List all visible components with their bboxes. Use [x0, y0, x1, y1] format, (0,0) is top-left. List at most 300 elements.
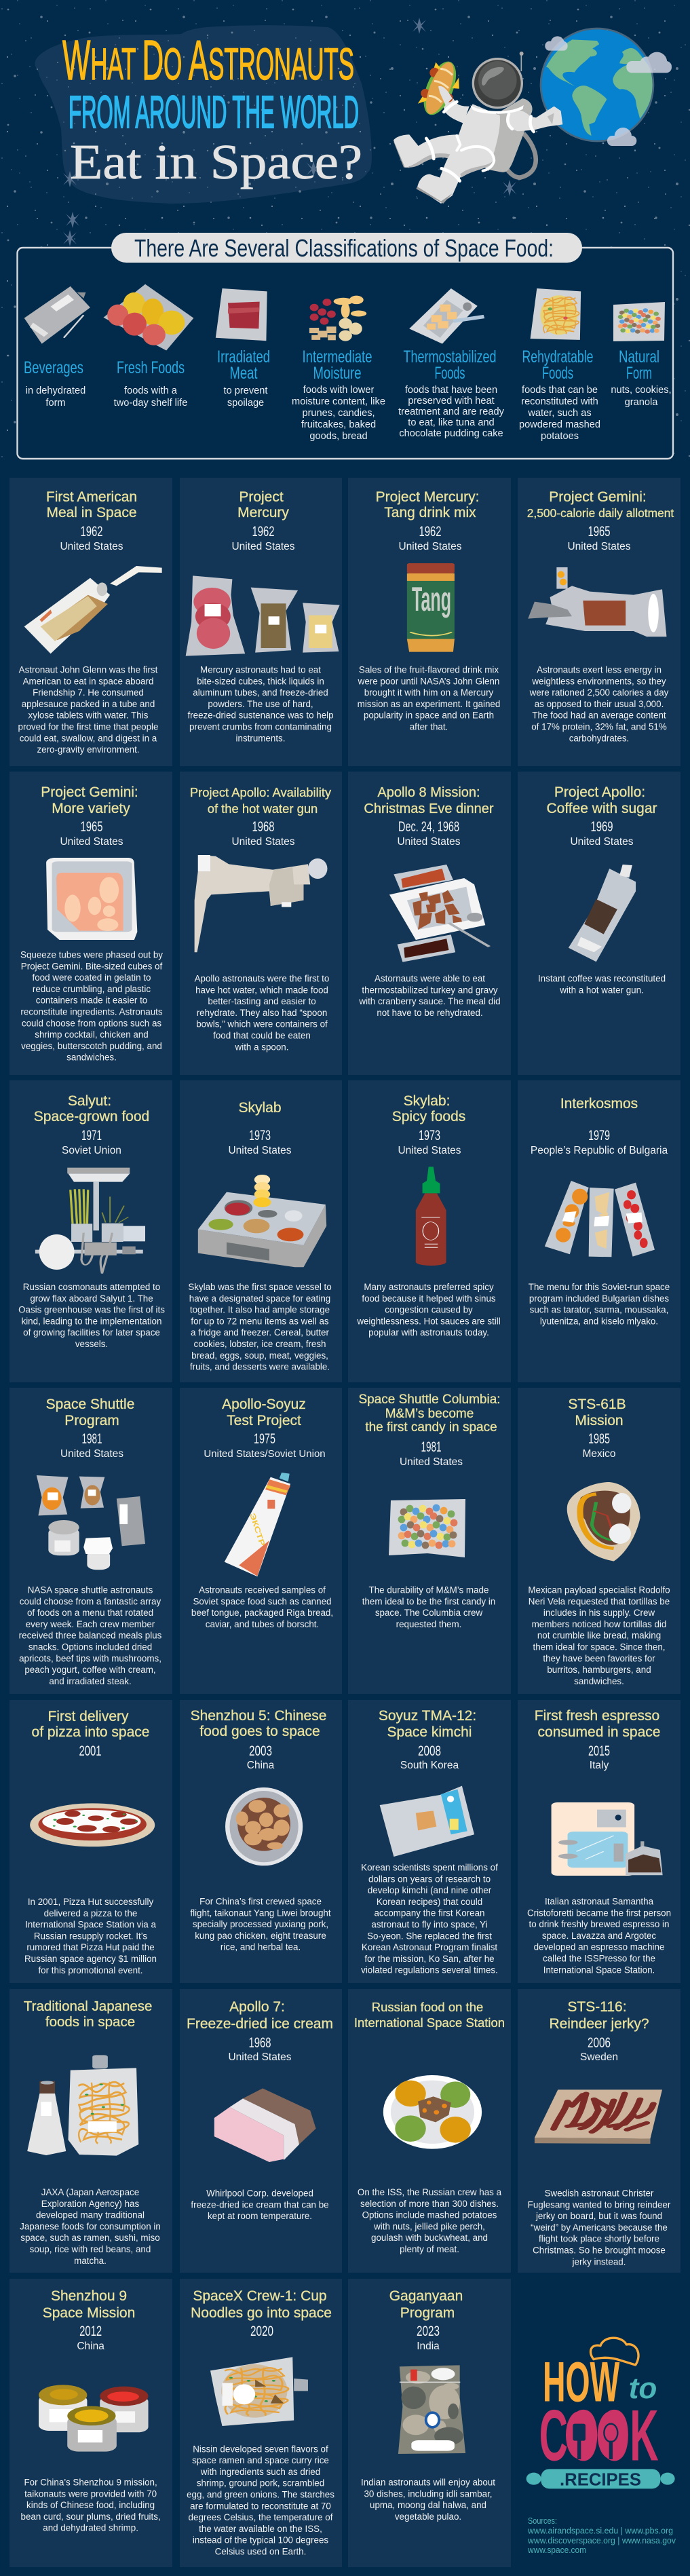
year and country: Soviet Union: [62, 1145, 121, 1156]
body text: Project Gemini. Bite-sized cubes of: [21, 961, 162, 971]
body text: taikonauts were provided with 70: [24, 2488, 157, 2499]
year and country: 1971: [81, 1128, 102, 1143]
body text: space, such as ramen, sushi, miso: [20, 2233, 160, 2243]
body text: apricots, beef tips with mushrooms,: [19, 1653, 161, 1663]
right leg and boot: [416, 145, 493, 204]
icon: hot water gun: [195, 855, 327, 952]
category: rehydratable foods: Rehydratable: [522, 347, 593, 366]
body text: bread, eggs, soup, meat, veggies,: [191, 1350, 328, 1361]
body text: requested them.: [396, 1619, 461, 1629]
body text: sandwiches.: [66, 1053, 117, 1063]
year and country: [400, 1439, 463, 1468]
body text: dollars on years of research to: [368, 1874, 491, 1884]
year and country: 1973: [249, 1128, 271, 1143]
year and country: [228, 2035, 292, 2063]
category: thermostabilized foods: treatment and are ready: [398, 406, 505, 417]
heading: Apollo-Soyuz: [222, 1397, 306, 1412]
body text: Neri Vela requested that tortillas be: [529, 1596, 670, 1606]
icon: gemini food bag: [528, 567, 666, 637]
body text: bowls,” which were containers of: [196, 1019, 328, 1029]
body text: caviar, and tubes of borscht.: [206, 1619, 319, 1629]
body text: Nissin developed seven flavors of: [193, 2444, 328, 2454]
body text: for this promotional event.: [38, 1965, 143, 1975]
heading: Gaganyaan: [389, 2288, 463, 2304]
card: Shenzhou 9 Space Mission: [9, 2279, 172, 2567]
logo: How to Cook Recipes: [526, 2338, 675, 2490]
heading pill: There Are Several Classifications of Space Food:: [134, 234, 554, 262]
body text: program included Bulgarian dishes: [529, 1293, 669, 1304]
body text: rumored that Pizza Hut paid the: [26, 1942, 155, 1952]
category: rehydratable foods: reconstituted with: [521, 396, 598, 407]
body text: freeze-dried ice cream that can be: [191, 2199, 329, 2210]
body text: violated regulations several times.: [361, 1965, 498, 1975]
body text: veggies, butterscotch pudding, and: [21, 1041, 162, 1051]
heading: Skylab: [238, 1100, 282, 1116]
body text: develop kimchi (and nine other: [368, 1885, 492, 1895]
body text: weightless environments, so they: [531, 676, 666, 686]
icon: borscht tube: ЭКСТР: [248, 1512, 267, 1547]
body text: bite-sized cubes, thick liquids in: [197, 676, 324, 686]
body text: brought it with him on a Mercury: [364, 687, 494, 698]
body text: Cristoforetti became the first person: [527, 1908, 671, 1918]
heading: Space Shuttle: [46, 1397, 134, 1412]
year and country: United States/Soviet Union: [204, 1448, 326, 1460]
body text: Mercury astronauts had to eat: [200, 665, 321, 675]
body text: plenty of meat.: [400, 2244, 459, 2254]
body text: matcha.: [74, 2256, 107, 2266]
heading: Salyut:: [68, 1093, 111, 1109]
category: intermediate moisture: moisture content, like: [292, 396, 385, 407]
body text: not crumble like bread, making: [537, 1631, 661, 1641]
category: thermostabilized foods: chocolate pudding cake: [399, 428, 503, 439]
year and country: 1975: [254, 1431, 275, 1447]
body text: for up to 72 menu items as well as: [191, 1316, 329, 1326]
body text: have a designated space for eating: [189, 1293, 330, 1304]
body text: Christmas. So he brought moose: [533, 2245, 666, 2256]
body text: In 2001, Pizza Hut successfully: [28, 1897, 153, 1907]
body text: and dehydrated shrimp.: [43, 2523, 138, 2533]
heading: Project Gemini:: [549, 489, 647, 505]
card: Apollo-Soyuz Test Project: [180, 1388, 342, 1694]
year and country: India: [417, 2341, 440, 2352]
body text: jerky instead.: [572, 2256, 626, 2267]
body text: food were coated in gelatin to: [33, 972, 151, 983]
year and country: United States: [231, 541, 295, 552]
category: thermostabilized foods: to eat, like tuna and: [408, 417, 495, 428]
heading: Space Mission: [43, 2305, 135, 2321]
card: Project Mercury Tang drink mix: [348, 478, 511, 766]
body text: rehydrate. They also had “spoon: [197, 1008, 327, 1018]
body text: soup, rice with red beans, and: [30, 2244, 151, 2254]
heading: Space kimchi: [387, 1724, 472, 1740]
logo: How to Cook Recipes: .RECIPES: [560, 2469, 641, 2490]
body text: accompany the first Korean: [374, 1908, 485, 1918]
year and country: 2015: [588, 1743, 610, 1759]
body text: The menu for this Soviet-run space: [529, 1282, 670, 1292]
category: intermediate moisture: [292, 296, 385, 442]
icon: kimchi pouch: [380, 1786, 474, 1857]
logo: How to Cook Recipes: to: [629, 2372, 657, 2405]
heading: Tang drink mix: [384, 505, 476, 520]
body text: selection of more than 300 dishes.: [360, 2199, 499, 2209]
category: rehydratable foods: [519, 288, 600, 442]
body text: developed many traditional: [36, 2210, 145, 2220]
body text: food that could be eaten: [213, 1030, 311, 1041]
body text: fruits, and desserts were available.: [190, 1362, 330, 1372]
category: rehydratable foods: potatoes: [541, 431, 579, 442]
body text: not have to be rehydrated.: [377, 1008, 483, 1018]
card: First delivery of pizza into space: [9, 1700, 172, 1983]
left arm: [440, 87, 469, 124]
body text: burritos, hamburgers, and: [547, 1665, 651, 1675]
body text: sandwiches.: [574, 1676, 624, 1686]
category: irradiated meat: to prevent: [224, 385, 267, 396]
body text: Instant coffee was reconstituted: [538, 973, 666, 984]
body text: with cranberry sauce. The meal did: [358, 996, 501, 1006]
body text: flight took place shortly before: [539, 2234, 659, 2244]
icon: Skylab food tray: [198, 1175, 326, 1267]
heading: Space-grown food: [34, 1109, 149, 1124]
year and country: [398, 524, 462, 552]
icon: espresso machine: [552, 1802, 663, 1876]
card: Skylab: [180, 1080, 342, 1382]
heading: Project: [239, 489, 284, 505]
body text: called the ISSPresso for the: [543, 1953, 655, 1964]
right arm and thumb: [507, 107, 562, 132]
body text: Many astronauts preferred spicy: [364, 1282, 494, 1292]
body text: NASA space shuttle astronauts: [28, 1585, 153, 1595]
body text: proved for the first time that people: [18, 722, 158, 732]
body text: instruments.: [236, 733, 285, 743]
card: Project Apollo Coffee with sugar: [518, 772, 681, 1075]
body text: congestion caused by: [385, 1305, 473, 1315]
body text: they have been favorites for: [543, 1653, 655, 1663]
icon: earth with clouds: [540, 28, 672, 146]
heading: Interkosmos: [560, 1096, 638, 1112]
body text: are formulated to reconstitute at 70: [190, 2501, 331, 2511]
body text: Oasis greenhouse was the first of its: [18, 1305, 165, 1315]
body text: better-tasting and easier to: [208, 996, 316, 1006]
category: natural form: Natural: [619, 347, 659, 366]
heading: food goes to space: [199, 1724, 320, 1739]
category: intermediate moisture: fruitcakes, baked: [301, 419, 376, 430]
panel: classifications of space food: [18, 233, 673, 459]
year and country: China: [77, 2341, 104, 2352]
body text: powders. The use of hard,: [208, 699, 313, 709]
year and country: [228, 1128, 292, 1156]
card: Apollo 8 Mission Christmas Eve dinner: [348, 772, 511, 1075]
category: beverages: Beverages: [24, 358, 83, 377]
category: natural form: granola: [625, 397, 658, 408]
heading: Shenzhou 5: Chinese: [191, 1708, 326, 1724]
body text: popularity in space and on Earth: [364, 711, 494, 721]
body text: Celsius used on Earth.: [215, 2546, 306, 2557]
body text: JAXA (Japan Aerospace: [41, 2187, 139, 2197]
body text: received three balanced meals plus: [19, 1631, 162, 1641]
year and country: 2003: [249, 1743, 272, 1759]
body text: could choose from options such as: [22, 1018, 161, 1028]
sources: www.airandspace.si.edu | www.pbs.org: [527, 2526, 673, 2535]
card: Russian food on the ISS: [348, 1989, 511, 2273]
body text: xylose tablets with water. This: [28, 711, 149, 721]
year and country: 1965: [80, 819, 103, 835]
body text: The food had an average content: [532, 711, 666, 721]
icon: Tang jar: Tang: [412, 580, 451, 618]
icon: freeze-dried ice cream: [214, 2088, 316, 2162]
category: intermediate moisture: goods, bread: [309, 431, 368, 442]
heading: Apollo 7:: [229, 1999, 285, 2015]
category: fresh foods: two-day shelf life: [114, 398, 187, 409]
body text: have hot water, which made food: [195, 985, 328, 995]
card: Salyut Space-grown food: [9, 1080, 172, 1382]
heading: [527, 489, 674, 520]
body text: Russian cosmonauts attempted to: [23, 1282, 160, 1292]
body text: them ideal for space. Since then,: [533, 1642, 666, 1652]
year and country: United States: [567, 541, 631, 552]
body text: Korean recipes) that could: [377, 1897, 482, 1907]
card: SpaceX Crew-1 Cup Noodles: [180, 2279, 342, 2567]
category: fresh foods: Fresh Foods: [117, 358, 185, 377]
body text: reconstitute ingredients. Astronauts: [20, 1007, 163, 1017]
body text: Skylab was the first space vessel to: [188, 1282, 332, 1292]
category: thermostabilized foods: preserved with heat: [408, 396, 495, 406]
body text: upma, moong dal halwa, and: [370, 2500, 486, 2510]
body text: 30 dishes, including idli sambar,: [364, 2488, 493, 2499]
left boot and leg: [394, 134, 459, 168]
body text: every week. Each crew member: [26, 1619, 155, 1629]
year and country: [580, 2035, 618, 2063]
body text: with a spoon.: [235, 1042, 288, 1052]
body text: Russian resupply rocket. It’s: [34, 1931, 147, 1941]
body text: mission as an experiment. It gained: [358, 699, 500, 709]
year and country: 2008: [418, 1743, 441, 1759]
body text: could eat, swallow, and digest in a: [20, 733, 157, 743]
body text: astronaut to fly into space, Yi: [371, 1919, 488, 1930]
card: Skylab Spicy foods: [348, 1080, 511, 1382]
icon: plate of Russian food: [383, 2075, 482, 2149]
icon: jerky on board: [535, 2089, 662, 2144]
body text: space. The Columbia crew: [375, 1608, 482, 1618]
body text: a fridge and freezer. Cereal, butter: [191, 1327, 330, 1338]
sources: www.space.com: [527, 2545, 586, 2555]
header title blob: [35, 25, 372, 204]
year and country: 1968: [252, 819, 274, 835]
year and country: Sweden: [580, 2051, 618, 2063]
body text: The durability of M&M’s made: [369, 1585, 488, 1595]
year and country: United States: [60, 1448, 123, 1460]
body text: includes in his supply. Crew: [543, 1608, 655, 1618]
body text: aluminum tubes, and freeze-dried: [193, 687, 328, 698]
year and country: [77, 2324, 104, 2352]
card: STS-61B Mission: [518, 1388, 681, 1694]
category: irradiated meat: spoilage: [227, 398, 264, 409]
sources: Sources:: [528, 2516, 557, 2526]
card: Apollo 7 Freeze-dried ice cream: [180, 1989, 342, 2273]
body text: with a hot water gun.: [559, 985, 644, 995]
body text: peach yogurt, coffee with cream,: [24, 1665, 156, 1675]
year and country: 1965: [588, 524, 611, 539]
body text: space ramen and space curry rice: [192, 2455, 329, 2465]
body text: of foods on a menu that rotated: [27, 1608, 153, 1618]
year: 2001: [79, 1743, 102, 1759]
heading: Spicy foods: [392, 1109, 465, 1124]
body text: Astornauts were able to eat: [375, 973, 485, 984]
heading: Noodles go into space: [191, 2305, 332, 2321]
category: thermostabilized foods: Thermostabilized: [403, 347, 497, 366]
body text: Fuglesang wanted to bring reindeer: [528, 2199, 671, 2210]
card: Traditional Japanese foods in space: [9, 1989, 172, 2273]
body text: rice, and herbal tea.: [221, 1942, 301, 1952]
year and country: 1973: [419, 1128, 440, 1143]
body text: with ingredients such as dried: [200, 2467, 320, 2477]
card: Project Mercury: [180, 478, 342, 766]
year and country: 2012: [79, 2324, 102, 2339]
body text: delivered a pizza to the: [44, 1908, 137, 1918]
body text: Soviet space food such as canned: [193, 1596, 331, 1606]
year and country: [231, 524, 295, 552]
title: Eat in Space?: [70, 134, 362, 189]
heading: International Space Station: [354, 2015, 505, 2030]
icon: candy bag: [389, 1499, 465, 1557]
body text: degrees Celsius, the temperature of: [189, 2512, 333, 2522]
body text: weightlessness. Hot sauces are still: [356, 1316, 501, 1326]
body text: beef tongue, packaged Riga bread,: [191, 1608, 333, 1618]
year and country: 1981: [81, 1431, 102, 1447]
year and country: 1979: [588, 1128, 610, 1143]
card: Gaganyaan Program: [348, 2279, 511, 2567]
year and country: 1962: [419, 524, 441, 539]
body text: kind, leading to the implementation: [22, 1316, 161, 1326]
category: intermediate moisture: prunes, candies,: [302, 408, 375, 419]
year and country: 2006: [588, 2035, 611, 2051]
body text: together. It also had ample storage: [190, 1305, 330, 1315]
year and country: United States: [60, 541, 123, 552]
heading: Russian food on the: [372, 2000, 483, 2014]
body text: For China’s Shenzhou 9 mission,: [24, 2477, 157, 2488]
year and country: [231, 819, 295, 848]
body text: and irradiated steak.: [49, 1676, 132, 1686]
body text: Mexican payload specialist Rodolfo: [528, 1585, 670, 1595]
icon: borscht tube: [225, 1473, 290, 1576]
year and country: United States: [398, 541, 462, 552]
heading: Apollo 8 Mission:: [377, 785, 480, 800]
logo: How to Cook Recipes: HOW: [543, 2350, 620, 2413]
heading: Test Project: [227, 1413, 301, 1428]
body text: Italian astronaut Samantha: [545, 1896, 654, 1907]
body text: Korean scientists spent millions of: [361, 1862, 498, 1873]
heading: Shenzhou 9: [51, 2288, 127, 2304]
icon: astronaut with sandwich: [394, 52, 562, 204]
body text: Friendship 7. He consumed: [33, 687, 144, 698]
category: irradiated meat: Meat: [229, 364, 258, 383]
card: Project Apollo hot water gun: [180, 772, 342, 1075]
year and country: [567, 524, 631, 552]
heading: Traditional Japanese: [24, 1999, 152, 2014]
year and country: [204, 1431, 326, 1460]
card: Soyuz TMA-12 Space kimchi: [348, 1700, 511, 1983]
heading: M&M’s become: [385, 1407, 474, 1421]
card: First fresh espresso consumed in space: [518, 1700, 681, 1983]
icon: bowl of pork and chicken: [225, 1787, 303, 1865]
heading: SpaceX Crew-1: Cup: [193, 2288, 327, 2304]
year and country: [582, 1431, 616, 1460]
icon: Tang jar: [407, 563, 455, 652]
body text: space. Lavazza and Argotec: [542, 1931, 656, 1941]
body text: Squeeze tubes were phased out by: [20, 950, 163, 960]
category: natural form: Form: [626, 364, 652, 383]
text: FROM AROUND THE WORLD: [69, 87, 359, 138]
body text: food because it helped with sinus: [362, 1293, 496, 1304]
year and country: [60, 1431, 123, 1460]
icon: food tray: [46, 858, 137, 940]
body text: Japanese foods for consumption in: [20, 2221, 161, 2231]
heading: foods in space: [45, 2014, 135, 2030]
heading: Project Gemini:: [41, 784, 138, 800]
category: rehydratable foods: foods that can be: [522, 385, 598, 396]
heading: Mercury: [237, 505, 289, 520]
heading: More variety: [52, 801, 130, 816]
icon: three food cans: [39, 2385, 149, 2452]
body text: grow flax aboard Salyut 1. The: [30, 1293, 153, 1304]
year: 2020: [250, 2324, 273, 2339]
body text: Korean Astronaut Program finalist: [362, 1942, 497, 1952]
year and country: United States: [400, 1456, 463, 1468]
year and country: [588, 1743, 610, 1771]
year and country: [247, 1743, 275, 1771]
year and country: United States: [231, 836, 295, 848]
card: Space Shuttle Program: [9, 1388, 172, 1694]
category: thermostabilized foods: Foods: [434, 364, 465, 383]
body text: bean curd, sour plums, dried fruits,: [21, 2512, 161, 2522]
body text: Indian astronauts will enjoy about: [361, 2477, 495, 2488]
year and country: United States: [228, 2051, 292, 2063]
heading: Program: [400, 2305, 455, 2321]
category: irradiated meat: [216, 288, 270, 409]
heading: STS-61B: [568, 1397, 626, 1412]
year and country: Dec. 24, 1968: [398, 819, 459, 835]
body text: Astronaut John Glenn was the first: [19, 665, 158, 675]
body text: snacks. Options included dried: [28, 1642, 152, 1652]
icon: camouflage food pack: [398, 2365, 465, 2454]
category: irradiated meat: Irradiated: [217, 347, 270, 366]
year and country: [60, 819, 123, 848]
year and country: 1981: [421, 1439, 441, 1455]
body text: zero-gravity environment.: [37, 744, 140, 755]
heading: 2,500-calorie daily allotment: [527, 506, 674, 520]
body text: the water available on the ISS,: [199, 2524, 322, 2534]
year and country: [531, 1128, 668, 1156]
icon: tortilla burrito: [567, 1482, 640, 1561]
year and country: People’s Republic of Bulgaria: [531, 1145, 668, 1156]
year and country: Mexico: [582, 1448, 616, 1460]
sources: [527, 2516, 676, 2555]
body text: freeze-dried sustenance was to help: [187, 711, 334, 721]
body text: shrimp cocktail, chicken and: [35, 1029, 149, 1040]
year and country: Italy: [590, 1760, 609, 1771]
icon: shuttle meals: [37, 1475, 145, 1570]
year and country: [397, 819, 461, 848]
body text: kept at room temperature.: [208, 2211, 312, 2221]
icon: applesauce tube: [24, 566, 162, 654]
category: beverages: [24, 286, 90, 409]
body text: shrimp, ground pork, scrambled: [197, 2478, 324, 2488]
card: First American Meal in Space: [9, 478, 172, 766]
year and country: South Korea: [400, 1760, 459, 1771]
heading: First fresh espresso: [535, 1708, 659, 1724]
year and country: United States: [570, 836, 634, 848]
body text: prevent crumbs from contaminating: [189, 722, 332, 732]
body text: specially processed yuxiang pork,: [193, 1919, 328, 1929]
